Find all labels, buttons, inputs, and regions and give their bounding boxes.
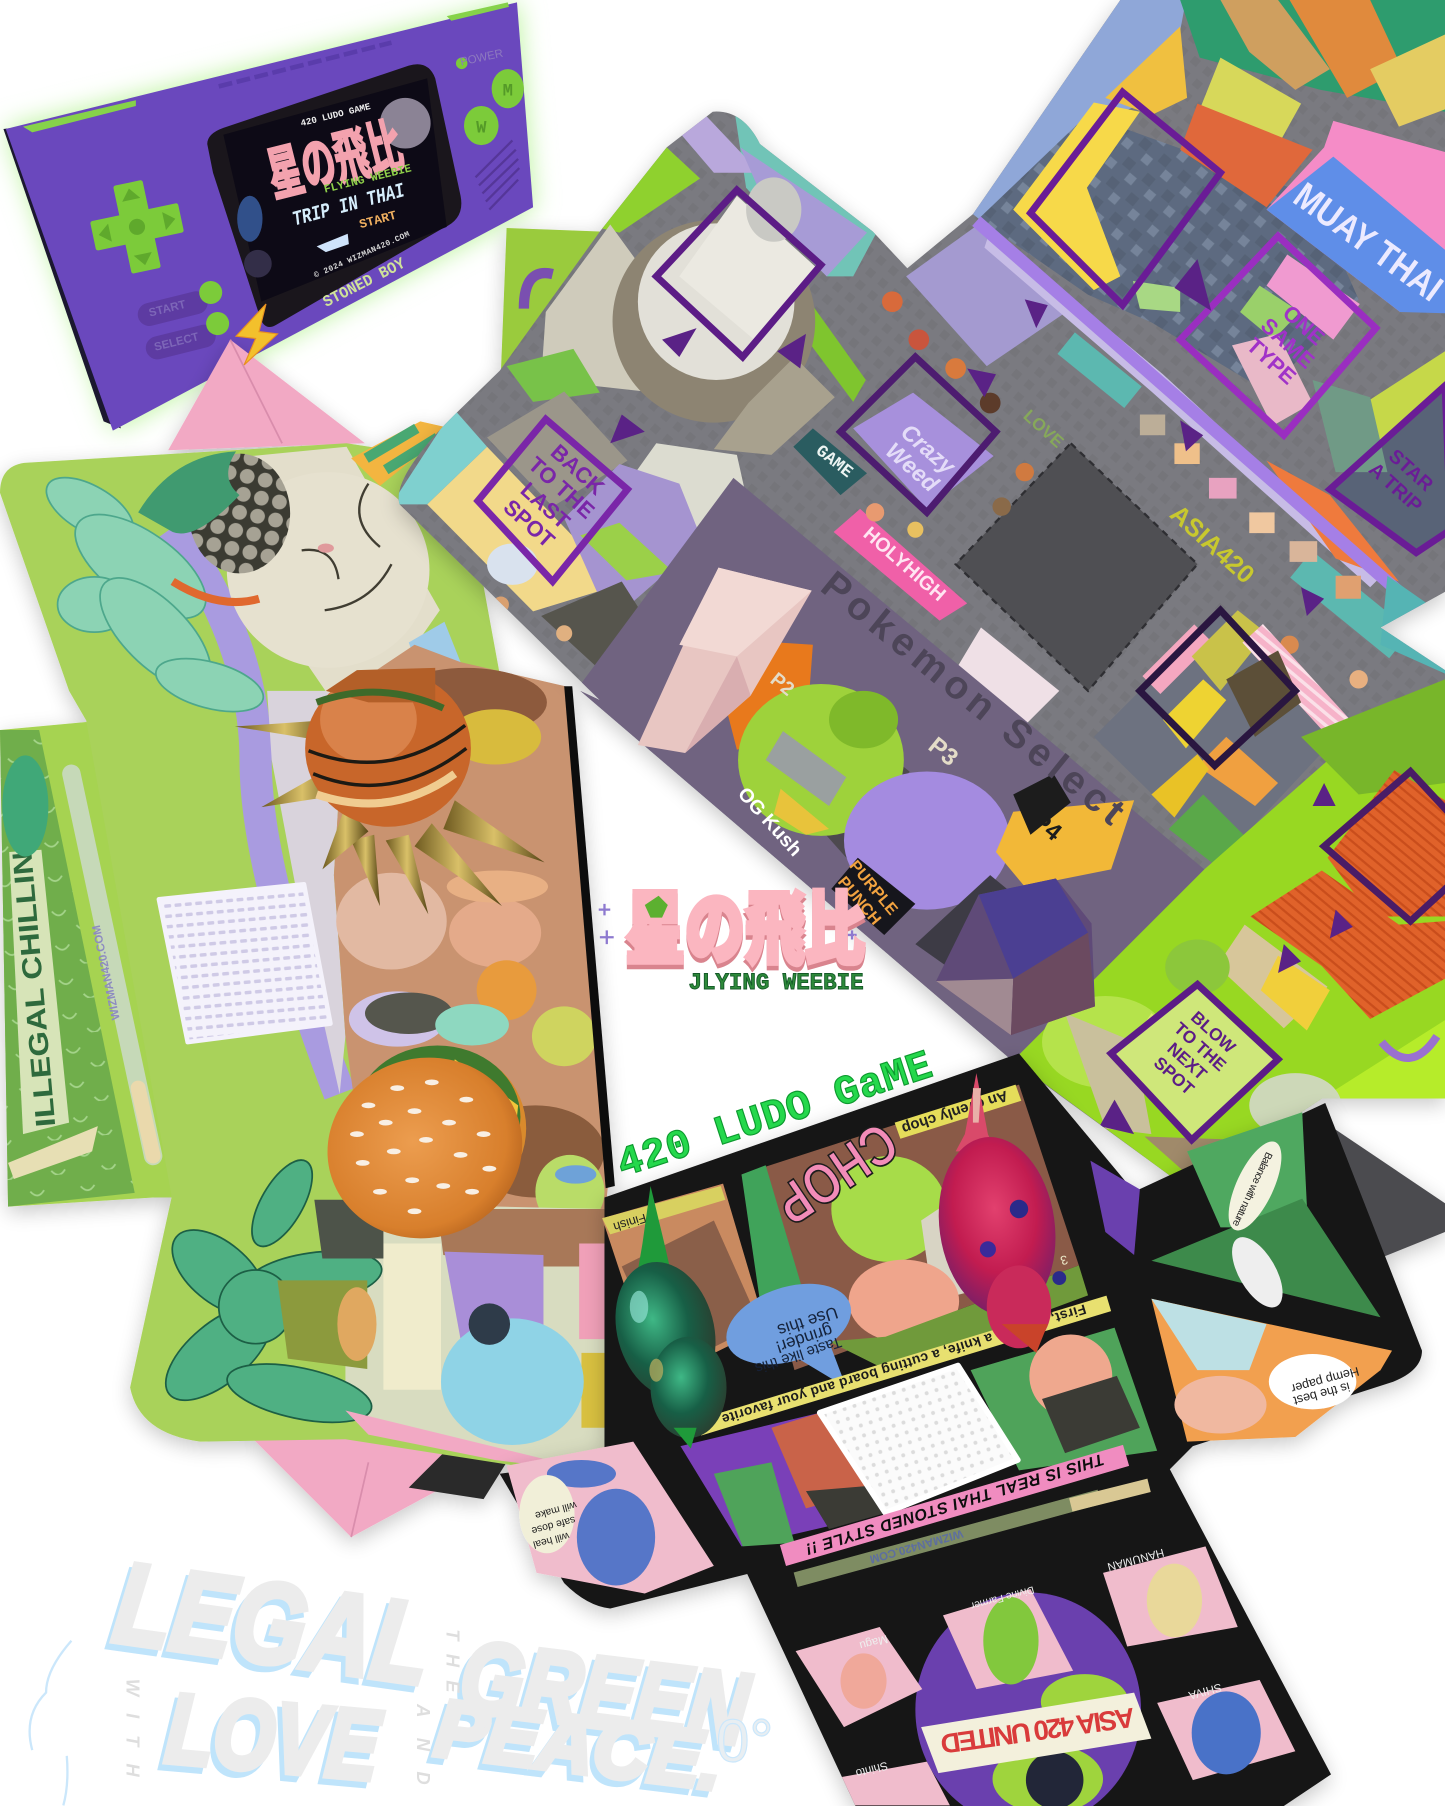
console screen: © 2024 WIZMAN420.COM: [313, 230, 411, 281]
map labels: GAME: [811, 442, 856, 483]
blue guardian wing panel: [507, 1442, 714, 1594]
blue speech bubble: grinder!: [773, 1320, 835, 1358]
lower gods panel: Divine Farmer: [969, 1583, 1035, 1611]
right flap panels: Balance with nature: [1230, 1150, 1274, 1228]
square: buddha: [656, 190, 821, 357]
square: back to the last spot: LAST: [516, 477, 575, 534]
title logo: JLYING WEEBIE: [689, 970, 864, 996]
console box: stoned boy handheld: [3, 2, 533, 431]
map labels: PURPLE: [846, 857, 901, 919]
console screen: TRIP IN THAI: [290, 180, 408, 232]
lower gods panel: ASIA 420 UNITED: [939, 1702, 1137, 1760]
main game board map: [391, 0, 1445, 1220]
console screen: STONED BOY: [320, 255, 409, 312]
square: back to the last spot: SPOT: [499, 494, 560, 553]
map labels: HOLYHIGH: [859, 523, 950, 606]
sparkles: [599, 904, 857, 944]
spikes: [235, 720, 545, 914]
comic board: [500, 1054, 1445, 1806]
buddha temple area: [507, 104, 881, 541]
square: blow to the next spot: [1111, 984, 1278, 1140]
map labels: P4: [1027, 807, 1067, 847]
teal leaf top: [36, 451, 269, 722]
left tab with scroll and joint: ILLEGAL CHILLIN: [6, 850, 61, 1128]
title logo: 星の飛比: [625, 885, 865, 974]
console screen: FLYING WEEBIE: [323, 162, 413, 197]
lower palm and DJ: [150, 1151, 610, 1485]
grey rear flap: [1325, 1123, 1445, 1261]
green flaps: [0, 443, 604, 1480]
slogan: legal the green with love and peace: LEGAL: [102, 1545, 434, 1715]
shinto box: [831, 1762, 950, 1805]
left folded board: [0, 340, 615, 1537]
blue guardian wing panel: will heal: [532, 1529, 571, 1550]
square: market: [1140, 610, 1295, 766]
purple circle and farmer: [915, 1592, 1141, 1806]
map labels: P2: [766, 668, 799, 701]
square: blow to the next spot: TO THE: [1170, 1018, 1230, 1075]
spiked glass burger: [235, 668, 545, 914]
chop panel: An evenly chop: [900, 1087, 1010, 1137]
slogan: legal the green with love and peace: GREEN: [454, 1620, 755, 1767]
square: star a trip: STAR: [1384, 445, 1437, 496]
blue guardian wing panel: will make: [533, 1499, 579, 1520]
hanuman box: [1103, 1546, 1238, 1647]
red glass figure: [928, 1073, 1067, 1353]
square: blow to the next spot: NEXT: [1163, 1038, 1211, 1084]
console buttons: SELECT: [153, 331, 200, 354]
map labels: ASIA420: [1164, 500, 1260, 589]
amethyst crystal: [936, 879, 1095, 1035]
upper city: [973, 0, 1445, 674]
square: back to the last spot: TO THE: [524, 452, 600, 524]
finish panel: [602, 1184, 766, 1382]
slogan: legal the green with love and peace: WITH: [123, 1679, 144, 1777]
square: temple roof: [1324, 771, 1445, 921]
black board outline: [500, 1054, 1422, 1806]
joint strip: [796, 1485, 1149, 1580]
chop panel: 3: [1059, 1252, 1069, 1268]
map labels: Pokemon Select: [813, 563, 1133, 834]
square: one same type: SAME: [1256, 313, 1320, 373]
park and temple roof: [1013, 679, 1445, 1191]
finish panel: Finish: [612, 1211, 648, 1234]
console buttons: [135, 48, 524, 362]
slogan: legal the green with love and peace: AND: [413, 1703, 434, 1785]
lower gods panel: [796, 1546, 1295, 1806]
map labels: Weed: [881, 437, 945, 497]
blue speech bubble: Taste like this: [753, 1333, 843, 1377]
square: blow to the next spot: SPOT: [1150, 1052, 1199, 1099]
buddha illustration: [189, 421, 461, 693]
title logo: 星の飛比: [625, 889, 865, 978]
arrow on flap: [524, 273, 553, 309]
stairs and street: [793, 223, 1197, 737]
right flap panels: Hemp paper: [1290, 1364, 1361, 1396]
left tab with scroll and joint: [0, 722, 172, 1207]
asia banner: [921, 1693, 1151, 1773]
pink tabs: [168, 340, 507, 1537]
slogan: legal the green with love and peace: LOVE: [162, 1672, 386, 1801]
map labels: P3: [923, 732, 963, 772]
map labels: OG Kush: [733, 783, 806, 861]
square: yellow statue: [1030, 92, 1220, 305]
instruction strip: First, prepare a knife, a cutting board and your favorite: [720, 1301, 1088, 1428]
crowd on the street: [493, 291, 1368, 689]
blue speech bubble: [716, 1269, 861, 1387]
map labels: LOVE: [1020, 405, 1068, 452]
square: one same type: TYPE: [1242, 333, 1301, 389]
console buttons: POWER: [459, 48, 504, 68]
blue guardian wing panel: safe dose: [530, 1513, 576, 1536]
map labels: [733, 175, 1445, 928]
chop panel: [741, 1085, 1088, 1370]
lower gods panel: Shinto: [854, 1759, 889, 1779]
square: crazy weed: [841, 357, 996, 512]
console buttons: W: [476, 119, 487, 138]
beach tile: [391, 391, 702, 679]
map labels: Crazy: [896, 418, 961, 480]
sesame seeds: [350, 1079, 496, 1214]
console buttons: START: [148, 299, 187, 319]
joint strip: WIZMAN420.COM: [868, 1527, 964, 1565]
lower gods panel: SHIVA: [1187, 1680, 1223, 1701]
rose quartz crystal: [638, 568, 812, 753]
square: one same type: [1180, 236, 1376, 435]
direction arrows: [610, 259, 1353, 1134]
subtitle: 420 ludo game: 420 LUDO GaME: [612, 1043, 938, 1189]
slogan: legal the green with love and peace: LEGAL: [107, 1539, 438, 1710]
title logo: [599, 885, 865, 996]
slogan: legal the green with love and peace: THE: [443, 1629, 464, 1693]
neon market: [1094, 610, 1353, 869]
shiva box: [1157, 1680, 1295, 1780]
green glass figure: [601, 1186, 730, 1448]
character select panel: [576, 478, 1204, 1065]
comic crowd: [334, 645, 615, 1229]
grinder card left: [159, 884, 330, 1042]
lightning bolt: [236, 304, 277, 365]
chop panel: CHOP: [763, 1109, 909, 1236]
magu box: [796, 1627, 922, 1727]
lower gods panel: Magu: [858, 1632, 889, 1651]
lavender river: [173, 527, 340, 1094]
d-pad: [84, 174, 190, 280]
pink headline strip: THIS IS REAL THAI STONED STYLE !!: [803, 1450, 1106, 1558]
right flap panels: [1090, 1112, 1392, 1442]
square: blow to the next spot: BLOW: [1187, 1007, 1240, 1058]
right flap panels: is the best: [1292, 1379, 1351, 1408]
square: back to the last spot: BACK: [546, 439, 610, 500]
console screen: 星の飛比: [261, 114, 409, 209]
slogan: legal the green with love and peace: PEACE.: [431, 1683, 727, 1806]
left tab with scroll and joint: WIZMAN420.COM: [91, 924, 123, 1021]
square: star a trip: A TRIP: [1364, 458, 1426, 517]
console screen: START: [358, 208, 399, 232]
square: back to the last spot: [478, 419, 628, 581]
folded corner flap: [500, 228, 600, 403]
slogan: legal the green with love and peace: GREEN: [450, 1625, 751, 1773]
blue speech bubble: Use this: [775, 1303, 841, 1341]
slogan: legal the green with love and peace: [30, 1539, 773, 1806]
console screen: 420 LUDO GAME: [299, 101, 372, 129]
arrow on lime flap: [1382, 1036, 1437, 1058]
square: star a trip: [1330, 386, 1445, 553]
slogan: legal the green with love and peace: 0°: [716, 1708, 773, 1775]
map labels: PUNCH: [834, 873, 885, 928]
how-to panels: [680, 1328, 1157, 1546]
console screen: [207, 64, 461, 327]
console buttons: M: [503, 83, 513, 102]
square: one same type: ONE: [1278, 300, 1330, 350]
white grinder card: [820, 1366, 1018, 1513]
toy hamburger: [307, 1036, 543, 1260]
lower gods panel: HANUMAN: [1106, 1546, 1165, 1572]
